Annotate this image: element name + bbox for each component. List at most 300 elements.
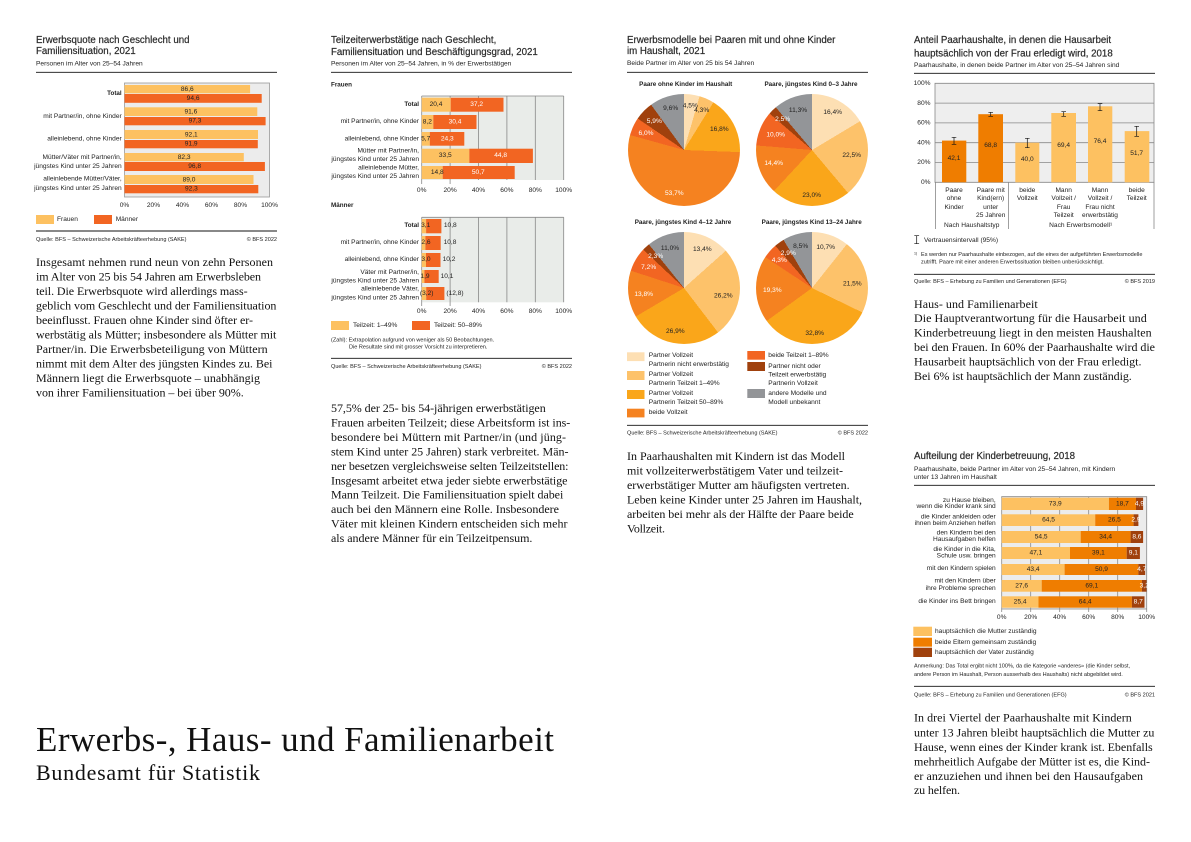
heading: Erwerbsmodelle (627, 35, 836, 67)
bar chart: Erwerbsquote: jüngstes Kind unter 25 Jahren (33, 163, 122, 170)
text block: nimmt mit dem Alter des jüngsten Kindes zu. Bei (36, 356, 273, 370)
bar chart: Erwerbsquote: 80% (234, 202, 247, 209)
stacked bar chart: Kinderbetreuung: 2,9 (1131, 516, 1141, 524)
stacked bar chart: Kinderbetreuung: 39,1 (1092, 550, 1105, 556)
pie chart: jüngstes Kind 4–12: 13,4% (693, 246, 712, 253)
pie chart: jüngstes Kind 0–3: 22,5% (842, 152, 861, 159)
text block: ner besetzen vergleichsweise selten Teilzeitstellen: (331, 459, 568, 473)
pie chart: jüngstes Kind 0–3: 14,4% (764, 160, 783, 167)
pie chart: Paare ohne Kinder: Paare ohne Kinder im Haushalt (639, 81, 733, 88)
bar chart: Männer: 60% (500, 308, 514, 315)
pie chart: jüngstes Kind 0–3: 10,0% (766, 132, 785, 138)
footnote: zutrifft. Paare mit einer anderen Erwerbssituation bleiben unberücksichtigt. (921, 259, 1104, 265)
text block: Die Hauptverantwortung für die Hausarbeit und (914, 311, 1147, 325)
bar chart: Männer: (3,2) (420, 290, 433, 297)
footnote: 1) (914, 252, 917, 256)
pie chart: jüngstes Kind 4–12: Paare, jüngstes Kind 4–12 Jahre (635, 219, 732, 226)
source (36, 236, 277, 243)
pie chart: jüngstes Kind 0–3 (756, 81, 868, 206)
stacked bar chart: Kinderbetreuung: wenn die Kinder krank sind (916, 503, 996, 510)
heading: Teilzeiterwerbstätige: Teilzeiterwerbstätige nach Geschlecht, (331, 35, 496, 46)
text block: zu helfen. (914, 783, 960, 797)
stacked bar chart: Kinderbetreuung: 50,9 (1095, 566, 1108, 573)
chart heading: Frauen: Frauen (331, 82, 352, 88)
pie chart: jüngstes Kind 0–3: 23,0% (802, 192, 821, 199)
heading: Erwerbsmodelle: Erwerbsmodelle bei Paaren mit und ohne Kinder (627, 35, 836, 46)
heading: Teilzeiterwerbstätige: Familiensituation und Beschäftigungsgrad, 2021 (331, 47, 538, 58)
text block: Insgesamt nehmen rund neun von zehn Personen (36, 255, 273, 269)
legend: Erwerbsmodelle (627, 351, 829, 417)
heading: Teilzeiterwerbstätige (331, 35, 538, 68)
stacked bar chart: Kinderbetreuung: 73,9 (1049, 500, 1062, 507)
stacked bar chart: Kinderbetreuung: 27,6 (1015, 582, 1028, 590)
bar chart: Erwerbsquote: 0% (120, 202, 129, 209)
bar chart: Frauen: alleinlebend, ohne Kinder (345, 136, 420, 142)
bar chart: Männer: 0% (417, 308, 427, 315)
heading: Erwerbsquote: Erwerbsquote nach Geschlecht und (36, 35, 189, 46)
bar chart: Frauen: Total (404, 101, 419, 108)
bar chart: Frauen: 14,8 (431, 169, 444, 176)
pie chart: Paare ohne Kinder: 9,6% (663, 105, 678, 112)
bar chart: Frauen: mit Partner/in, ohne Kinder (341, 118, 420, 125)
legend: Erwerbsmodelle: Partnerin nicht erwerbstätig (649, 361, 729, 368)
bar chart: Erwerbsquote: alleinlebende Mütter/Väter, (43, 176, 122, 182)
legend: Teilzeit (331, 321, 482, 330)
bar chart: Erwerbsquote: 96,8 (188, 163, 201, 170)
text block: arbeiten bei mehr als der Hälfte der Paare beide (627, 507, 854, 521)
text block: Hausarbeit hauptsächlich von der Frau erledigt. (914, 354, 1142, 368)
heading: Kinderbetreuung (914, 451, 1116, 481)
bar chart: Männer: 2,6 (421, 239, 431, 246)
pie chart: jüngstes Kind 0–3: Paare, jüngstes Kind 0–3 Jahre (764, 81, 858, 88)
bar chart: Hausarbeit: 25 Jahren (976, 212, 1006, 219)
pie chart: jüngstes Kind 0–3: 16,4% (823, 109, 842, 116)
note: Die Resultate sind mit grosser Vorsicht zu interpretieren. (349, 344, 488, 350)
panel: Erwerbsmodelle (627, 35, 868, 535)
bar chart: Hausarbeit: Nach Haushaltstyp (944, 222, 1000, 229)
text block (914, 297, 1155, 383)
stacked bar chart: Kinderbetreuung: 54,5 (1035, 534, 1048, 540)
stacked bar chart: Kinderbetreuung: die Kinder ins Bett bringen (918, 598, 996, 605)
pie chart: Paare ohne Kinder (628, 81, 740, 206)
bar chart: Erwerbsquote: 92,1 (185, 132, 198, 138)
bar chart: Hausarbeit: 100% (914, 80, 931, 87)
stacked bar chart: Kinderbetreuung: den Kindern bei den (937, 530, 996, 536)
bar chart: Männer (330, 217, 572, 315)
stacked bar chart: Kinderbetreuung: 34,4 (1099, 534, 1112, 540)
heading: Teilzeiterwerbstätige: Personen im Alter von 25–54 Jahren, in % der Erwerbstätigen (331, 60, 512, 68)
footnote (914, 252, 1142, 265)
stacked bar chart: Kinderbetreuung: 69,1 (1085, 582, 1099, 590)
heading: Erwerbsquote (36, 35, 189, 68)
stacked bar chart: Kinderbetreuung: 40% (1053, 614, 1066, 621)
bar chart: Frauen: 5,7 (421, 136, 431, 142)
bar chart: Frauen: Mütter mit Partner/in, (357, 148, 419, 154)
bar chart: Männer: jüngstes Kind unter 25 Jahren (330, 294, 419, 302)
text block: mit vollzeiterwerbstätigem Vater und teilzeit- (627, 464, 843, 478)
bar chart: Hausarbeit: Teilzeit (1054, 212, 1074, 219)
source: © BFS 2021 (1125, 691, 1155, 698)
text block: Kinderbetreuung liegt in den meisten Haushalten (914, 326, 1152, 340)
bar chart: Hausarbeit: Vollzeit / (1088, 195, 1112, 202)
title: Erwerbs-, Haus- und Familienarbeit (36, 720, 554, 759)
source (914, 278, 1155, 285)
text block: mehrheitlich Aufgabe der Mütter ist es, die Kind- (914, 754, 1150, 768)
pie chart: Paare ohne Kinder: 53,7% (665, 190, 684, 197)
heading: Erwerbsmodelle: Beide Partner im Alter von 25 bis 54 Jahren (627, 60, 755, 67)
stacked bar chart: Kinderbetreuung: ihre Probleme sprechen (926, 585, 996, 592)
text block: beeinflusst. Frauen ohne Kinder sind öfter er- (36, 313, 253, 327)
text block: In drei Viertel der Paarhaushalte mit Kindern (914, 711, 1132, 725)
stacked bar chart: Kinderbetreuung: 80% (1111, 614, 1124, 621)
bar chart: Erwerbsquote: 97,3 (189, 118, 202, 124)
stacked bar chart: Kinderbetreuung: 100% (1138, 614, 1155, 621)
heading: Kinderbetreuung: Paarhaushalte, beide Partner im Alter von 25–54 Jahren, mit Kindern (914, 466, 1116, 473)
bar chart: Frauen: 33,5 (439, 152, 452, 159)
stacked bar chart: Kinderbetreuung: zu Hause bleiben, (943, 497, 996, 504)
bar chart: Erwerbsquote: 82,3 (178, 154, 191, 161)
bar chart: Männer: 3,1 (421, 222, 431, 229)
legend: Teilzeit: Teilzeit: 1–49% (353, 322, 397, 329)
text block: Insgesamt arbeitet etwa jeder siebte erwerbstätige (331, 474, 568, 488)
bar chart: Hausarbeit: 80% (917, 100, 931, 107)
legend: Erwerbsmodelle: Partnerin Teilzeit 1–49% (649, 380, 720, 387)
stacked bar chart: Kinderbetreuung: 18,7 (1116, 500, 1129, 507)
bar chart: Frauen (330, 96, 572, 194)
legend: Frauen / Männer: Frauen (57, 216, 78, 223)
stacked bar chart: Kinderbetreuung (915, 497, 1155, 621)
bar chart: Hausarbeit: Kind(ern) (977, 195, 1004, 202)
bar chart: Frauen: alleinlebende Mütter, (358, 164, 419, 172)
bar chart: Hausarbeit: Paare (945, 187, 963, 194)
stacked bar chart: Kinderbetreuung: 8,6 (1132, 534, 1142, 540)
bar chart: Hausarbeit: 42,1 (948, 155, 961, 162)
bar chart: Hausarbeit: Frau nicht (1085, 204, 1115, 211)
text block (627, 449, 862, 536)
source: Quelle: BFS – Erhebung zu Familien und Generationen (EFG) (914, 692, 1067, 698)
footnote: Es werden nur Paarhaushalte einbezogen, auf die eines der aufgeführten Erwerbsmodelle (921, 252, 1142, 258)
text block (914, 711, 1154, 797)
heading: Anteil Paarhaushalte (914, 35, 1120, 69)
source: Quelle: BFS – Erhebung zu Familien und Generationen (EFG) (914, 279, 1067, 285)
bar chart: Hausarbeit: 20% (917, 159, 931, 166)
pie chart: Paare ohne Kinder: 4,5% (683, 102, 698, 110)
legend: Zuständigkeit: beide Eltern gemeinsam zuständig (935, 639, 1036, 646)
pie chart: jüngstes Kind 4–12: 7,2% (641, 264, 656, 271)
source (627, 430, 868, 437)
source: © BFS 2022 (542, 363, 572, 370)
bar chart: Frauen: jüngstes Kind unter 25 Jahren (330, 156, 419, 163)
legend: Erwerbsmodelle: beide Vollzeit (649, 409, 688, 416)
bar chart: Hausarbeit (914, 80, 1154, 229)
text block: Bei 6% ist hauptsächlich der Mann zuständig. (914, 369, 1132, 383)
legend: Erwerbsmodelle: Partner nicht oder (768, 363, 822, 370)
legend: Frauen / Männer (36, 215, 139, 224)
bar chart: Frauen: 8,2 (423, 118, 432, 126)
bar chart: Erwerbsquote: 92,3 (185, 186, 198, 192)
pie chart: jüngstes Kind 13–24 (756, 219, 868, 344)
bar chart: Hausarbeit: 40,0 (1021, 156, 1034, 163)
bar chart: Erwerbsquote: jüngstes Kind unter 25 Jahren (33, 185, 122, 192)
title: Bundesamt für Statistik (36, 760, 260, 785)
heading: Anteil Paarhaushalte: Paarhaushalte, in denen beide Partner im Alter von 25–54 Jahren sind (914, 62, 1120, 69)
bar chart: Männer: alleinlebende Väter, (361, 286, 419, 292)
legend: Teilzeit: Teilzeit: 50–89% (434, 322, 482, 329)
bar chart: Frauen: 20,4 (430, 101, 443, 108)
bar chart: Männer: Total (404, 222, 419, 229)
legend: Frauen / Männer: Männer (116, 216, 139, 223)
text block: unter 13 Jahren bleibt hauptsächlich die Mutter zu (914, 726, 1154, 740)
bar chart: Hausarbeit: beide (1129, 187, 1145, 194)
bar chart: Hausarbeit: Vollzeit / (1051, 195, 1076, 202)
bar chart: Erwerbsquote: 100% (261, 202, 278, 209)
bar chart: Frauen: 30,4 (449, 118, 462, 126)
stacked bar chart: Kinderbetreuung: 47,1 (1029, 550, 1043, 556)
bar chart: Männer: mit Partner/in, ohne Kinder (341, 239, 420, 246)
text block: auch bei den Männern eine Rolle. Insbesondere (331, 502, 559, 516)
text block: Väter mit kleinen Kindern entscheiden sich mehr (331, 516, 568, 530)
bar chart: Erwerbsquote: 60% (205, 202, 218, 209)
bar chart: Männer: jüngstes Kind unter 25 Jahren (330, 278, 419, 284)
legend: Erwerbsmodelle: andere Modelle und (768, 390, 827, 397)
bar chart: Hausarbeit: unter (983, 204, 999, 211)
text block: Partner/in. Die Erwerbsbeteiligung von Müttern (36, 342, 268, 356)
stacked bar chart: Kinderbetreuung: 64,4 (1079, 598, 1092, 606)
bar chart: Hausarbeit: Nach Erwerbsmodell¹ (1049, 222, 1113, 229)
note: andere Person im Haushalt, Person ausserhalb des Haushalts) nicht abgebildet wird. (914, 672, 1123, 678)
pie chart: jüngstes Kind 13–24: 8,5% (793, 243, 808, 250)
bar chart: Frauen: 80% (529, 187, 542, 194)
source: Quelle: BFS – Schweizerische Arbeitskräfteerhebung (SAKE) (627, 431, 778, 437)
bar chart: Männer: 10,8 (444, 239, 457, 246)
bar chart: Hausarbeit: Paare mit (977, 187, 1005, 194)
panel: Teilzeiterwerbstätige (330, 35, 572, 545)
panel: Erwerbsquote (33, 35, 278, 399)
bar chart: Männer: alleinlebend, ohne Kinder (345, 256, 420, 263)
heading: Anteil Paarhaushalte: Anteil Paarhaushalte, in denen die Hausarbeit (914, 35, 1111, 46)
stacked bar chart: Kinderbetreuung: 60% (1082, 614, 1095, 621)
legend: Zuständigkeit (913, 627, 1037, 657)
bar chart: Hausarbeit: 69,4 (1057, 142, 1070, 149)
note: (Zahl): Extrapolation aufgrund von weniger als 50 Beobachtungen. (331, 337, 495, 343)
bar chart: Hausarbeit: 76,4 (1094, 138, 1107, 145)
bar chart: Frauen: 20% (443, 187, 457, 194)
bar chart: Erwerbsquote: 20% (147, 202, 160, 209)
bar chart: Männer: 10,2 (443, 256, 456, 263)
pie chart: Paare ohne Kinder: 5,9% (647, 118, 662, 125)
text block: In Paarhaushalten mit Kindern ist das Modell (627, 449, 846, 463)
stacked bar chart: Kinderbetreuung: 64,5 (1042, 516, 1055, 524)
bar chart: Hausarbeit: 40% (917, 139, 931, 146)
stacked bar chart: Kinderbetreuung: 26,5 (1108, 516, 1121, 524)
bar chart: Erwerbsquote: 91,6 (184, 108, 198, 116)
pie chart: jüngstes Kind 4–12: 13,8% (634, 291, 653, 298)
text block: Männern liegt die Erwerbsquote – unabhängig (36, 371, 260, 385)
stacked bar chart: Kinderbetreuung: 3,2 (1140, 582, 1149, 590)
pie chart: jüngstes Kind 0–3: 11,3% (789, 107, 807, 114)
bar chart: Hausarbeit: erwerbstätig (1082, 212, 1118, 219)
stacked bar chart: Kinderbetreuung: die Kinder ankleiden oder (921, 514, 996, 520)
heading: Kinderbetreuung: Aufteilung der Kinderbetreuung, 2018 (914, 451, 1075, 462)
text block: erwerbstätiger Mutter am häufigsten vertreten. (627, 478, 850, 492)
bar chart: Hausarbeit: beide (1019, 187, 1036, 194)
legend: Erwerbsmodelle: beide Teilzeit 1–89% (768, 352, 829, 359)
text block: Haus- und Familienarbeit (914, 297, 1038, 311)
legend: Erwerbsmodelle: Modell unbekannt (768, 399, 821, 406)
bar chart: Erwerbsquote: Total (107, 90, 122, 97)
text block: Vollzeit. (627, 522, 665, 536)
text block: werbstätig als Mütter; insbesondere als Mütter mit (36, 328, 277, 342)
pie chart: jüngstes Kind 4–12 (628, 219, 740, 344)
bar chart: Erwerbsquote: 89,0 (183, 176, 196, 184)
bar chart: Erwerbsquote: mit Partner/in, ohne Kinder (43, 113, 122, 120)
bar chart: Frauen: 50,7 (472, 169, 485, 176)
bar chart: Erwerbsquote: Mütter/Väter mit Partner/in, (43, 154, 122, 161)
bar chart: Hausarbeit: Vollzeit (1017, 195, 1038, 202)
bar chart: Männer: (12,8) (446, 290, 464, 297)
text block: Frauen arbeiten Teilzeit; diese Arbeitsform ist ins- (331, 416, 570, 430)
stacked bar chart: Kinderbetreuung: Schule usw. bringen (937, 552, 996, 560)
pie chart: jüngstes Kind 4–12: 2,3% (648, 253, 663, 260)
text block: Mann Teilzeit. Die Familiensituation spielt dabei (331, 488, 564, 502)
note (331, 337, 495, 350)
legend: Zuständigkeit: hauptsächlich die Mutter zuständig (935, 628, 1037, 635)
pie chart: Paare ohne Kinder: 4,3% (694, 107, 709, 114)
bar chart: Frauen: 44,8 (494, 152, 507, 159)
text block: als andere Männer für ein Teilzeitpensum. (331, 531, 532, 545)
panel: Aufteilung der Kinderbetreuung (913, 451, 1155, 797)
text block (331, 401, 570, 545)
pie chart: Paare ohne Kinder: 6,0% (638, 130, 654, 137)
pie chart: jüngstes Kind 4–12: 26,9% (666, 328, 685, 335)
bar chart: Frauen: 60% (500, 187, 514, 194)
heading: Erwerbsquote: Personen im Alter von 25–54 Jahren (36, 60, 143, 68)
bar chart: Männer: 100% (555, 308, 572, 315)
bar chart: Hausarbeit: Mann (1055, 187, 1072, 194)
heading: Anteil Paarhaushalte: hauptsächlich von der Frau erledigt wird, 2018 (914, 48, 1113, 60)
bar chart: Männer: 40% (472, 308, 485, 315)
text block: stem Kind unter 25 Jahren) stark verbreitet. Män- (331, 444, 568, 458)
bar chart: Männer: 10,1 (441, 273, 454, 280)
pie chart: Paare ohne Kinder: 16,8% (710, 126, 729, 133)
bar chart: Frauen: 37,2 (470, 101, 483, 108)
bar chart: Hausarbeit: 68,8 (984, 142, 997, 149)
heading: Erwerbsquote: Familiensituation, 2021 (36, 46, 136, 57)
text block: geblich vom Geschlecht und der Familiensituation (36, 298, 276, 312)
pie chart: jüngstes Kind 0–3: 2,5% (775, 116, 790, 123)
heading: Erwerbsmodelle: im Haushalt, 2021 (627, 46, 705, 57)
bar chart: Männer: 10,8 (444, 222, 457, 229)
bar chart: Hausarbeit: 0% (921, 179, 931, 186)
stacked bar chart: Kinderbetreuung: die Kinder in die Kita, (933, 546, 996, 553)
text block: Hause, wenn eines der Kinder krank ist. Ebenfalls (914, 740, 1153, 754)
legend: Vertrauensintervall: Vertrauensintervall (95%) (924, 237, 998, 244)
legend: Erwerbsmodelle: Partner Vollzeit (649, 352, 693, 359)
stacked bar chart: Kinderbetreuung: mit den Kindern über (934, 578, 996, 584)
text block: er anzuziehen und ihnen bei den Hausaufgaben (914, 769, 1143, 783)
bar chart: Männer: Väter mit Partner/in, (360, 269, 419, 276)
bar chart: Hausarbeit: Kinder (944, 204, 964, 211)
pie chart: jüngstes Kind 13–24: 2,9% (781, 250, 796, 257)
note: Anmerkung: Das Total ergibt nicht 100%, da die Kategorie «anderes» (die Kinder selbst, (914, 664, 1131, 670)
bar chart: Hausarbeit: Teilzeit (1127, 195, 1147, 202)
bar chart: Erwerbsquote: 40% (176, 202, 189, 209)
bar chart: Männer: 20% (443, 308, 457, 315)
text block: besondere bei Müttern mit Partner/in (und jüng- (331, 430, 566, 444)
text block: teil. Die Erwerbsquote wird allerdings mass- (36, 284, 248, 298)
legend: Erwerbsmodelle: Partnerin Teilzeit 50–89% (649, 399, 723, 406)
pie chart: jüngstes Kind 13–24: Paare, jüngstes Kind 13–24 Jahre (762, 219, 862, 226)
pie chart: jüngstes Kind 13–24: 10,7% (816, 244, 835, 251)
source: Quelle: BFS – Schweizerische Arbeitskräfteerhebung (SAKE) (36, 237, 187, 243)
source (914, 691, 1155, 698)
bar chart: Erwerbsquote: 86,6 (181, 86, 194, 93)
bar chart: Frauen: 40% (472, 187, 485, 194)
source: © BFS 2019 (1125, 278, 1155, 285)
stacked bar chart: Kinderbetreuung: ihnen beim Anziehen helfen (915, 520, 996, 527)
source: © BFS 2022 (838, 430, 868, 437)
bar chart: Männer: 3,0 (421, 256, 431, 263)
legend: Zuständigkeit: hauptsächlich der Vater zuständig (935, 649, 1034, 656)
bar chart: Hausarbeit: Mann (1092, 187, 1109, 194)
bar chart: Frauen: 24,3 (441, 136, 454, 142)
pie chart: jüngstes Kind 13–24: 32,8% (805, 330, 824, 337)
pie chart: jüngstes Kind 13–24: 4,3% (772, 257, 787, 264)
stacked bar chart: Kinderbetreuung: 4,7 (1137, 566, 1147, 573)
bar chart: Erwerbsquote: 91,9 (185, 140, 198, 148)
stacked bar chart: Kinderbetreuung: 20% (1024, 614, 1037, 621)
stacked bar chart: Kinderbetreuung: 8,7 (1134, 598, 1143, 606)
note (914, 664, 1131, 678)
heading: Kinderbetreuung: unter 13 Jahren im Haushalt (914, 474, 997, 481)
bar chart: Hausarbeit: 51,7 (1130, 150, 1143, 157)
text block: 57,5% der 25- bis 54-jährigen erwerbstätigen (331, 401, 546, 415)
pie chart: jüngstes Kind 13–24: 21,5% (843, 280, 862, 288)
legend: Erwerbsmodelle: Teilzeit erwerbstätig (768, 372, 827, 378)
pie chart: jüngstes Kind 4–12: 26,2% (714, 292, 733, 300)
bar chart: Männer: 1,9 (420, 273, 430, 280)
source: Quelle: BFS – Schweizerische Arbeitskräfteerhebung (SAKE) (331, 364, 482, 370)
bar chart: Männer: 80% (529, 308, 542, 315)
bar chart: Frauen: 100% (555, 187, 572, 194)
text block: von ihrer Familiensituation – bei über 90%. (36, 386, 244, 400)
stacked bar chart: Kinderbetreuung: 9,1 (1129, 550, 1138, 556)
text block: Leben keine Kinder unter 25 Jahren im Haushalt, (627, 492, 862, 506)
stacked bar chart: Kinderbetreuung: mit den Kindern spielen (927, 565, 996, 572)
title (36, 720, 554, 785)
bar chart: Hausarbeit: 60% (917, 120, 931, 126)
text block: im Alter von 25 bis 54 Jahren am Erwerbsleben (36, 270, 261, 284)
legend: Erwerbsmodelle: Partner Vollzeit (649, 390, 693, 397)
pie chart: jüngstes Kind 13–24: 19,3% (763, 287, 782, 294)
bar chart: Frauen: jüngstes Kind unter 25 Jahren (330, 173, 419, 180)
bar chart: Erwerbsquote (33, 83, 278, 209)
text block: bei den Frauen. In 60% der Paarhaushalte wird die (914, 340, 1155, 354)
bar chart: Erwerbsquote: alleinlebend, ohne Kinder (47, 136, 123, 142)
legend: Erwerbsmodelle: Partnerin Vollzeit (768, 380, 818, 387)
chart heading: Männer: Männer (331, 202, 354, 209)
pie chart: jüngstes Kind 4–12: 11,0% (661, 245, 679, 252)
text block (36, 255, 277, 400)
panel: Anteil Paarhaushalte (914, 35, 1155, 383)
legend: Erwerbsmodelle: Partner Vollzeit (649, 371, 693, 378)
bar chart: Erwerbsquote: 94,6 (187, 95, 200, 102)
bar chart: Hausarbeit: ohne (947, 195, 962, 202)
source: © BFS 2022 (247, 236, 277, 243)
stacked bar chart: Kinderbetreuung: Hausaufgaben helfen (933, 536, 996, 543)
stacked bar chart: Kinderbetreuung: 43,4 (1027, 566, 1040, 573)
stacked bar chart: Kinderbetreuung: 25,4 (1014, 598, 1027, 606)
